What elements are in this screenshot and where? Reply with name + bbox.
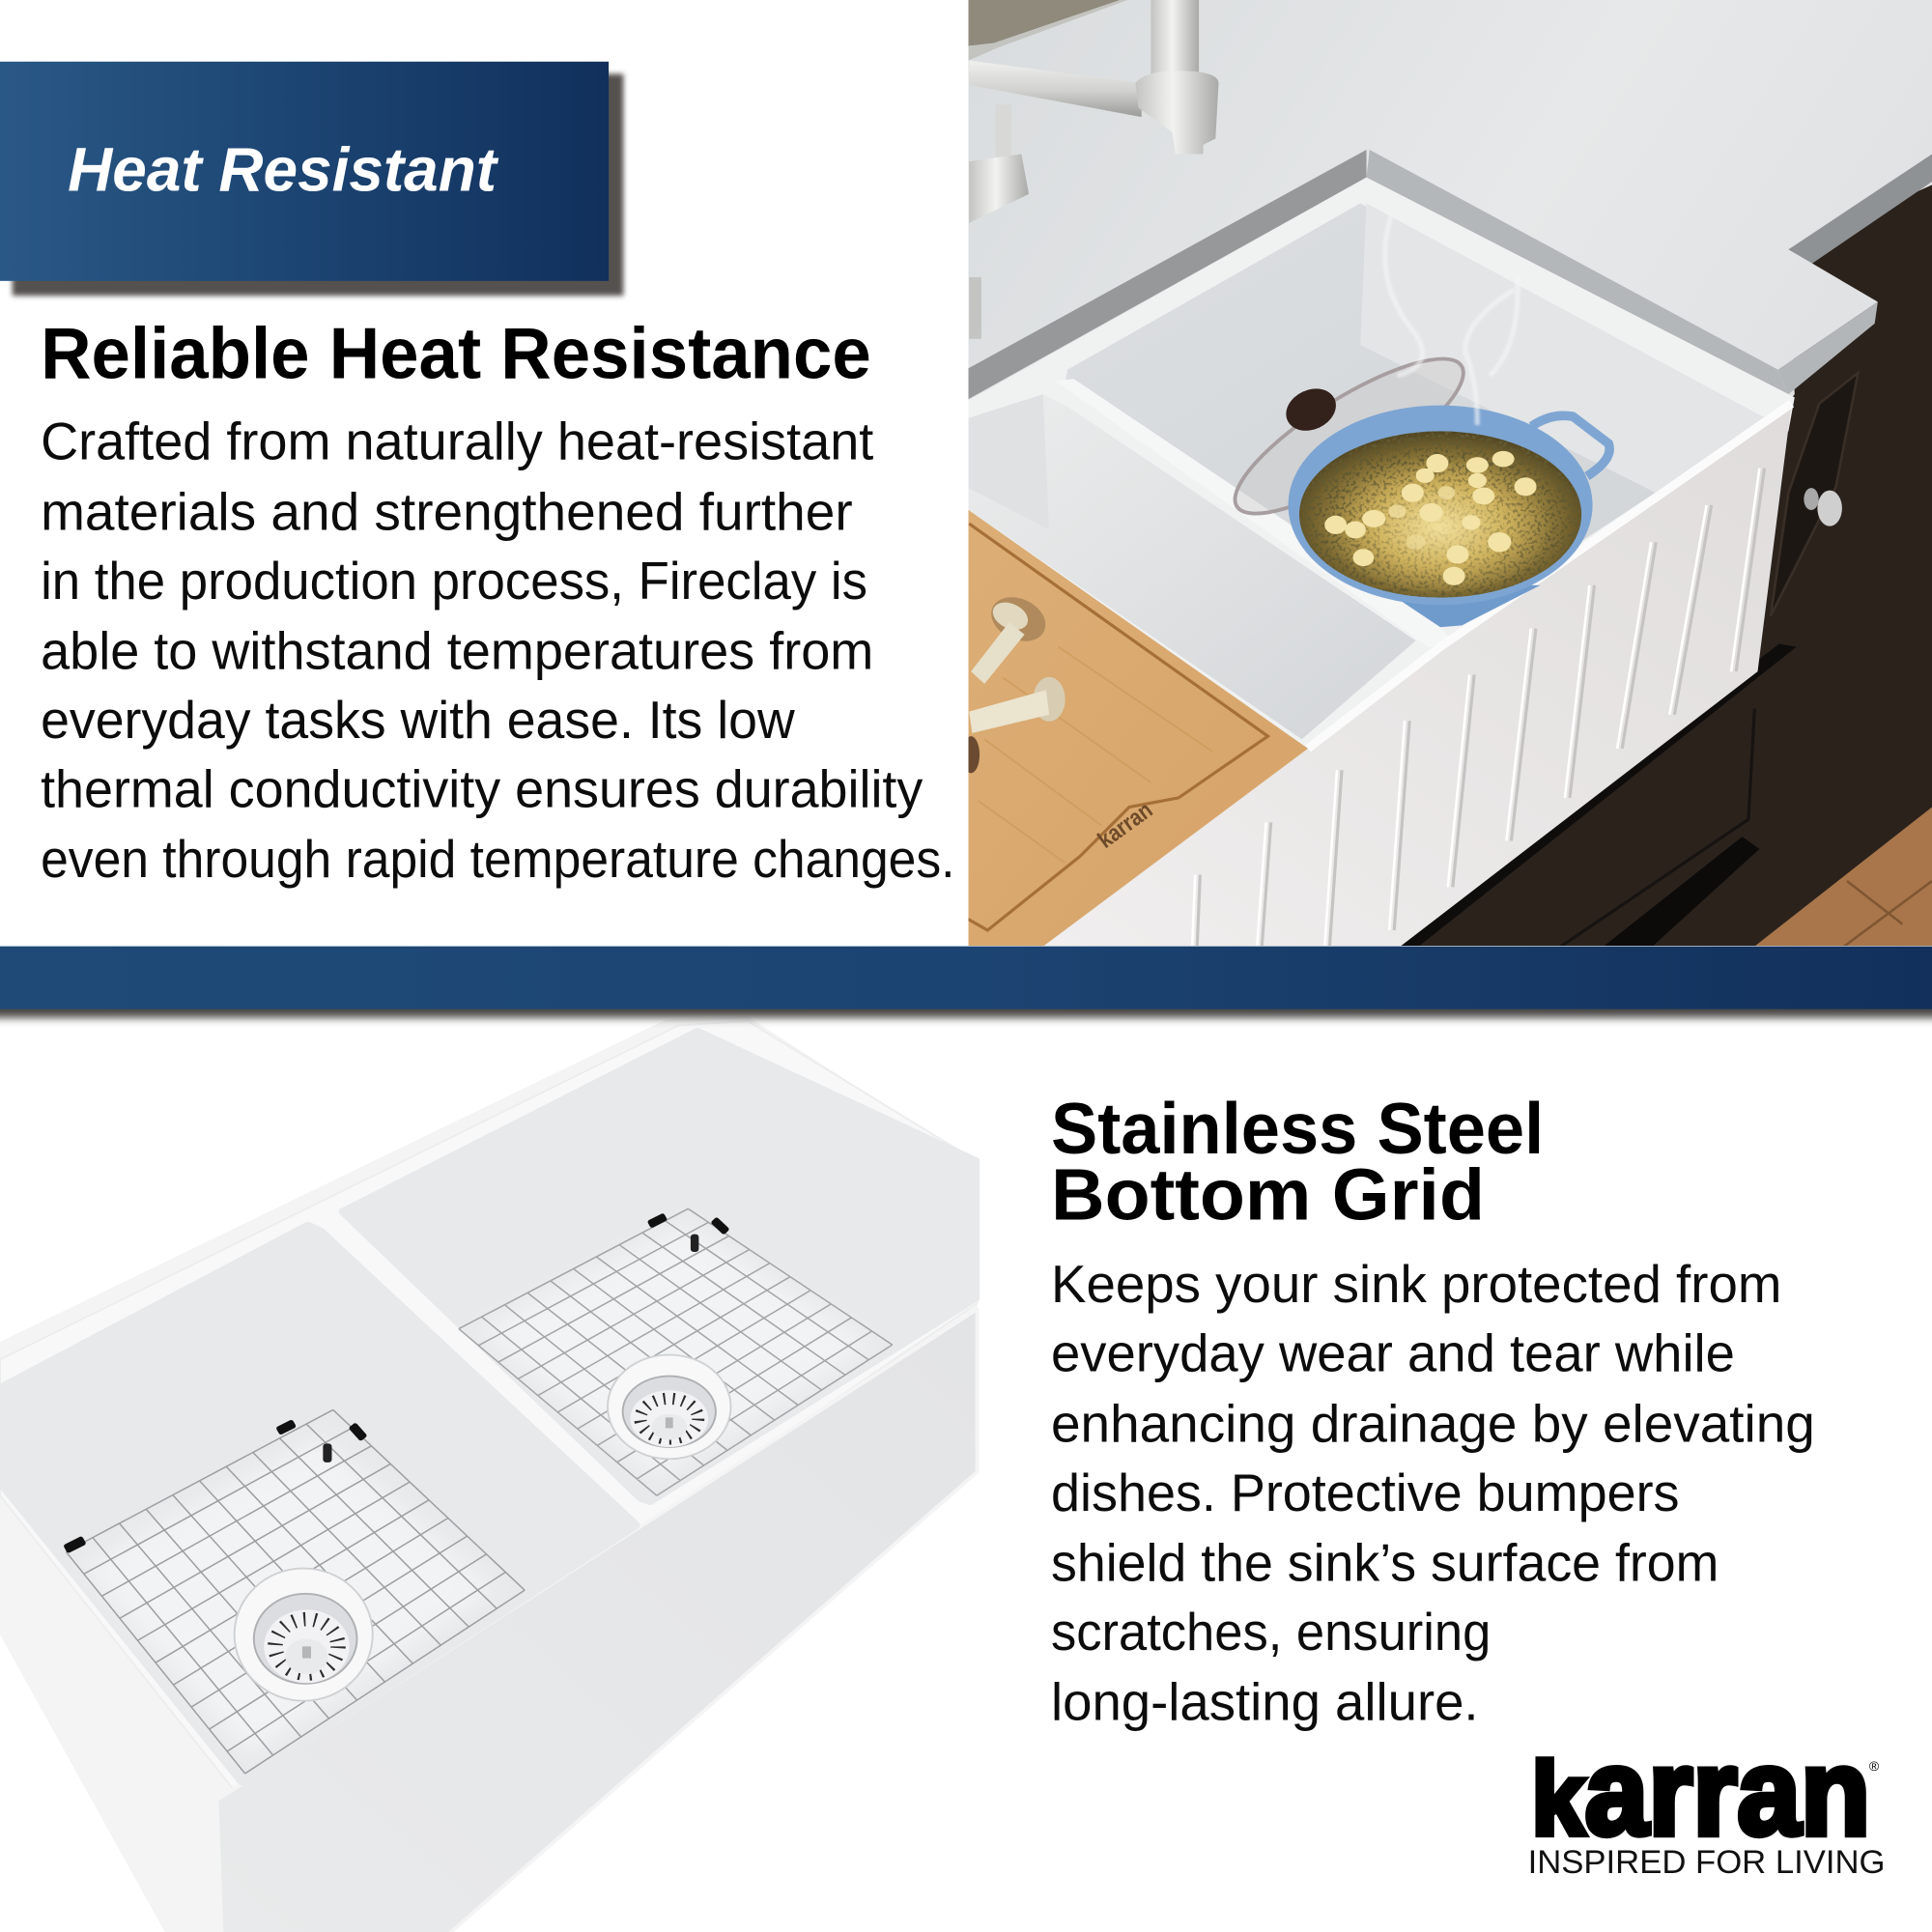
front face (216, 1309, 978, 1932)
bar shadow (0, 996, 1932, 1018)
right basin (1065, 203, 1764, 541)
banner: Heat Resistant: Heat Resistant (68, 135, 499, 205)
text block: bottom grid description: Keeps your sink protected from (1051, 1254, 1781, 1314)
blue pot (1289, 406, 1609, 627)
banner: Heat Resistant (0, 62, 609, 281)
backsplash corner (966, 0, 1127, 62)
heading: Stainless Steel Bottom Grid (1051, 1088, 1544, 1236)
wooden cutting board (966, 508, 1308, 949)
right drain (608, 1355, 731, 1459)
text block: bottom grid description: long-lasting allure. (1051, 1672, 1479, 1732)
banner shadow (13, 74, 623, 296)
logo: karran: ® (1869, 1758, 1880, 1774)
pot lid (1233, 357, 1465, 516)
mushrooms (962, 588, 1065, 773)
photo: farmhouse sink with boiling pot (962, 0, 1932, 949)
sink rim top (858, 1088, 978, 1304)
text block: bottom grid description: enhancing drainage by elevating (1051, 1393, 1815, 1453)
left basin (0, 1227, 635, 1780)
text block: heat resistance description: materials and strengthened further (41, 481, 853, 541)
countertop (968, 0, 1932, 400)
text block: heat resistance description: able to withstand temperatures from (41, 621, 873, 681)
text block: heat resistance description (41, 412, 955, 889)
left drain (235, 1569, 373, 1701)
logo: karran: INSPIRED FOR LIVING (1528, 1844, 1886, 1881)
drawers (1378, 643, 1797, 949)
heading: Stainless Steel Bottom Grid: Bottom Grid (1051, 1154, 1485, 1236)
left basin (966, 394, 1416, 739)
left grid (63, 1409, 525, 1774)
board logo: karran (1094, 797, 1157, 854)
panel: white sink product render (0, 1016, 978, 1932)
text block: heat resistance description: in the production process, Fireclay is (41, 551, 867, 611)
sink outer body (0, 1016, 978, 1932)
logo: karran: karran (1531, 1724, 1870, 1861)
apron front with flutes (1040, 404, 1792, 949)
text block: bottom grid description: scratches, ensuring (1051, 1602, 1491, 1662)
text block: heat resistance description: even through rapid temperature changes. (41, 829, 955, 889)
cabinet door with knobs (1771, 373, 1858, 616)
text block: bottom grid description: dishes. Protective bumpers (1051, 1463, 1680, 1522)
steam (1385, 215, 1518, 425)
text block: heat resistance description: everyday tasks with ease. Its low (41, 690, 795, 750)
blue divider bar (0, 947, 1932, 1009)
right basin (343, 1032, 978, 1501)
heading: Reliable Heat Resistance: Reliable Heat Resistance (41, 313, 871, 394)
text block: bottom grid description: shield the sink’s surface from (1051, 1532, 1719, 1592)
sink rim (966, 178, 1795, 749)
text block: heat resistance description: thermal conductivity ensures durability (41, 758, 923, 818)
main faucet (969, 0, 1218, 154)
heading: Stainless Steel Bottom Grid: Stainless Steel (1051, 1088, 1544, 1169)
text block: bottom grid description: everyday wear and tear while (1051, 1323, 1735, 1383)
dumplings (1324, 451, 1537, 585)
right grid (459, 1208, 893, 1495)
dark cabinet (1420, 185, 1932, 946)
text block: bottom grid description (1051, 1254, 1815, 1732)
faucet side handle (969, 104, 1029, 339)
counter edges (966, 150, 1932, 401)
text block: heat resistance description: Crafted from naturally heat-resistant (41, 412, 873, 471)
wood floor (1751, 807, 1932, 949)
